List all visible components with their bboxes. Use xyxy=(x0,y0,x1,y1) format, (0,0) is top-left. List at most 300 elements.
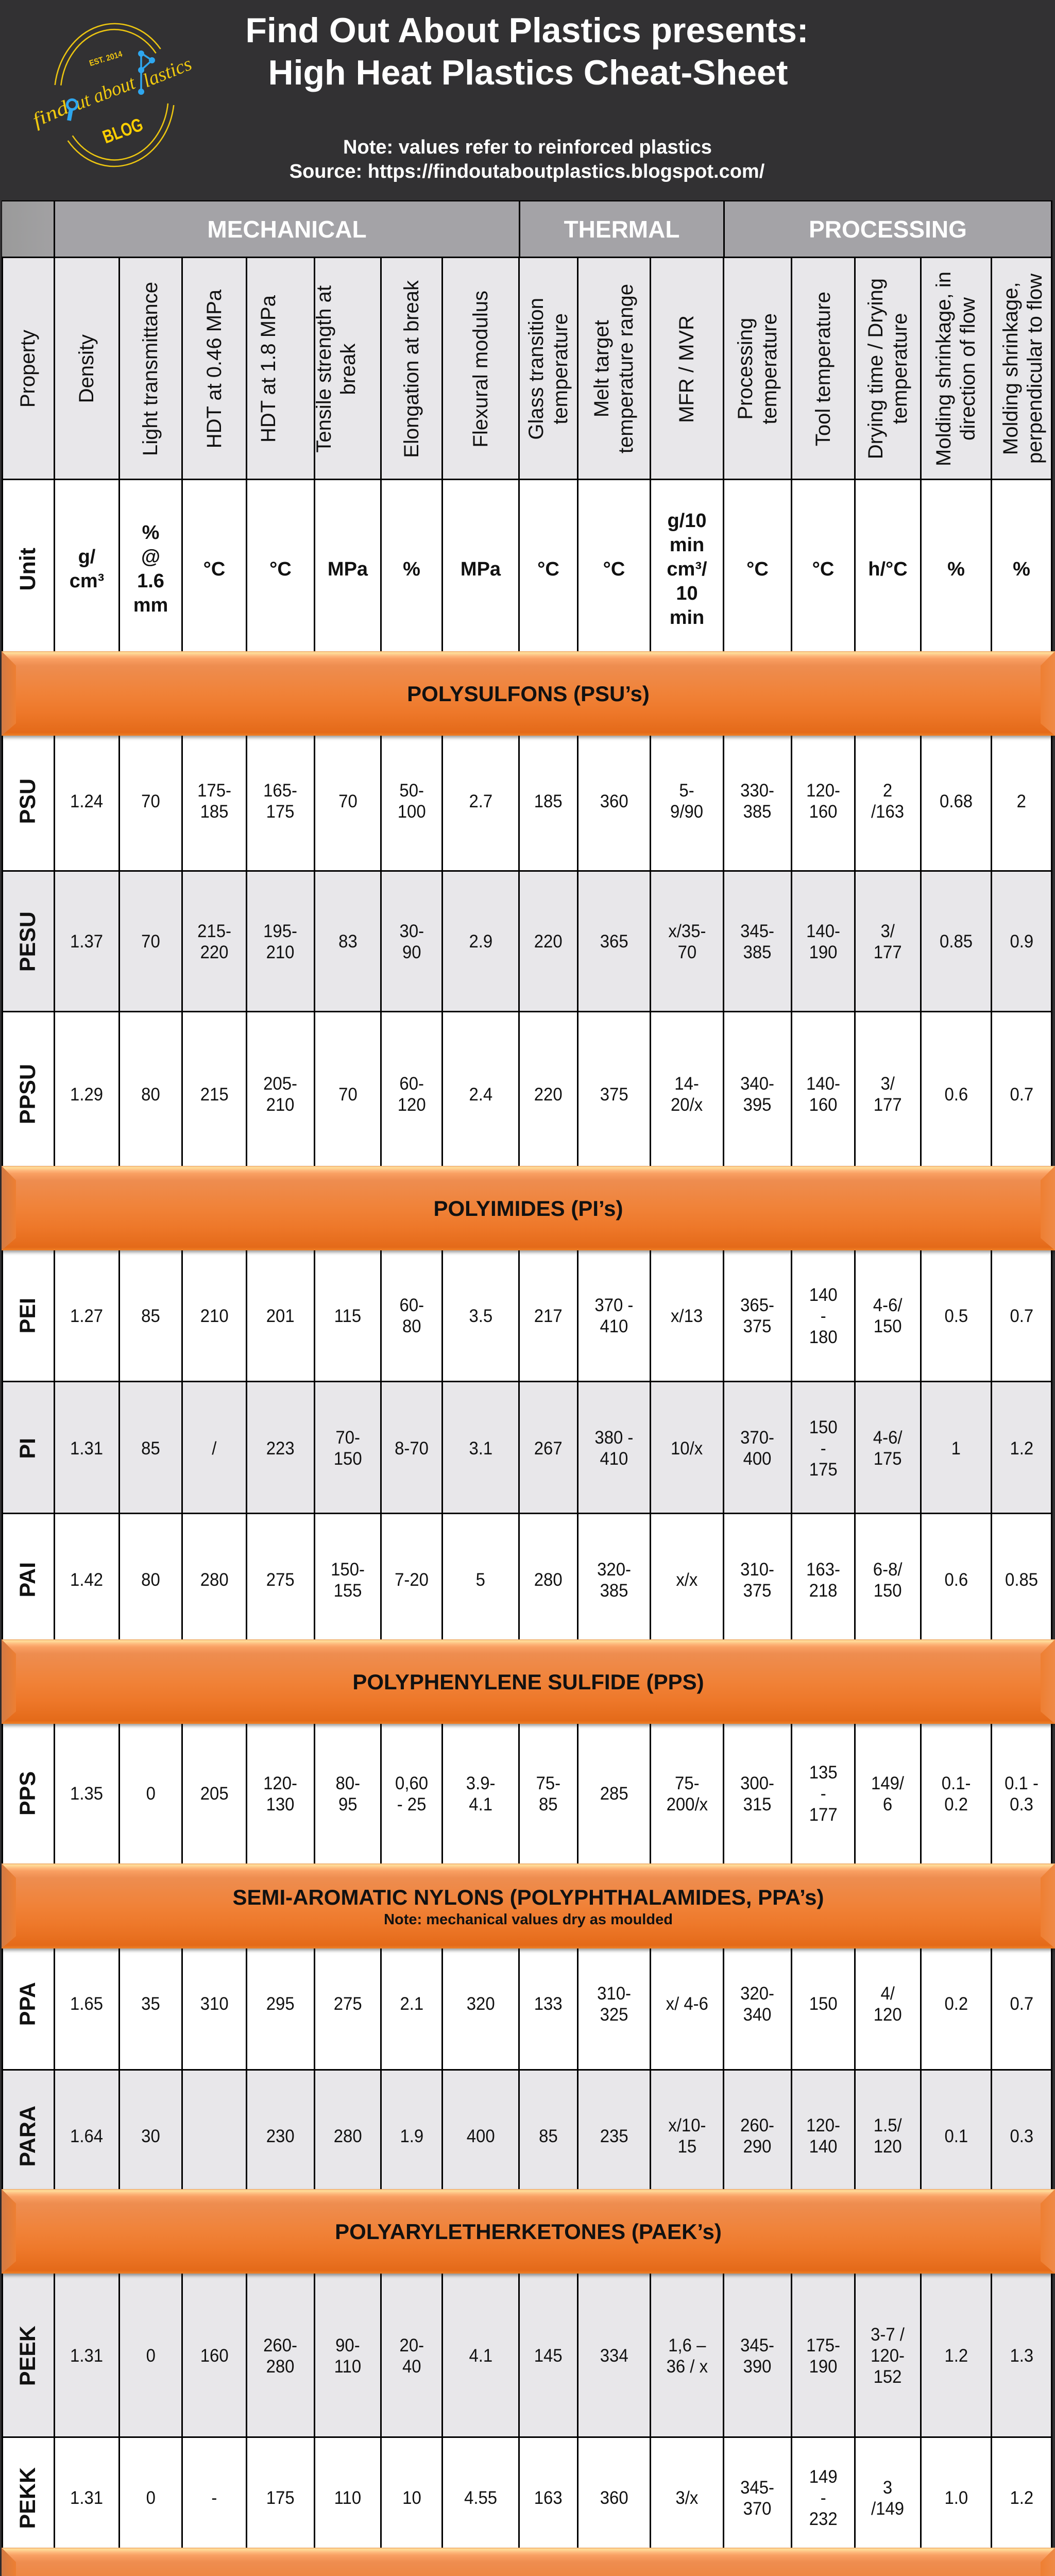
row: PEKK: 345- xyxy=(741,2477,774,2498)
row: PEKK: 1.31 xyxy=(70,2488,104,2508)
row: PPS: 300- xyxy=(741,1773,774,1793)
row: PEEK: PEEK xyxy=(15,2326,40,2386)
row: PEKK: 149 xyxy=(809,2467,837,2487)
row: PEI: 3.5 xyxy=(469,1306,492,1326)
row: PEEK: 152 xyxy=(874,2367,902,2387)
property header row: Molding shrinkage, xyxy=(999,282,1022,455)
property header row: HDT at 0.46 MPa xyxy=(203,290,226,448)
row: PAI: 1.42 xyxy=(70,1570,104,1590)
category header row xyxy=(2,201,1051,258)
row: PESU: 220 xyxy=(534,931,563,952)
row: PSU: 160 xyxy=(809,802,837,822)
row: PAI xyxy=(2,1513,1051,1639)
row: PEI: 0.7 xyxy=(1010,1306,1033,1326)
row: PARA: 230 xyxy=(266,2126,295,2146)
row: PEI: 201 xyxy=(266,1306,295,1326)
property header row: Processing xyxy=(734,318,756,420)
row: PEI: 217 xyxy=(534,1306,563,1326)
row: PSU: 9/90 xyxy=(670,802,704,822)
section band: semi-aromatic nylons: Note: mechanical values dry as moulded xyxy=(384,1911,673,1928)
row: PPA: 133 xyxy=(534,1994,563,2014)
row: PPSU: 395 xyxy=(743,1095,772,1115)
row: PEEK: 1.31 xyxy=(70,2346,104,2366)
row: PI: 4-6/ xyxy=(873,1428,903,1448)
row: PEI: 80 xyxy=(402,1316,421,1336)
row: PPS: 6 xyxy=(883,1794,893,1815)
row: PPS: 135 xyxy=(809,1762,837,1783)
row: PPA: 275 xyxy=(334,1994,362,2014)
row: PARA: 260- xyxy=(741,2115,774,2136)
row: PEI: 210 xyxy=(200,1306,228,1326)
row: PEEK: 40 xyxy=(402,2357,421,2376)
unit row: % xyxy=(403,558,420,580)
row: PEKK: 3/x xyxy=(676,2488,698,2508)
row: PEKK: 232 xyxy=(809,2509,837,2529)
unit row: °C xyxy=(603,558,625,580)
row: PI: 85 xyxy=(141,1438,160,1458)
row: PEI xyxy=(2,1250,1051,1381)
note: Note: values refer to reinforced plastics xyxy=(343,137,712,158)
unit row: 1.6 xyxy=(137,570,164,592)
title line 1: Find Out About Plastics presents: xyxy=(245,11,809,50)
category: thermal: THERMAL xyxy=(564,215,679,242)
row: PAI: 0.6 xyxy=(944,1570,968,1590)
row: PI: PI xyxy=(15,1438,40,1459)
row: PPS: 0.2 xyxy=(944,1794,968,1815)
row: PESU: 365 xyxy=(600,931,628,952)
row: PARA xyxy=(2,2069,1051,2189)
row: PPSU: 3/ xyxy=(881,1074,895,1094)
row: PI: 1.2 xyxy=(1010,1438,1033,1458)
row: PPS: - xyxy=(821,1784,826,1804)
row: PAI: PAI xyxy=(15,1562,40,1598)
row: PARA: 30 xyxy=(141,2126,160,2146)
row: PPSU: 0.7 xyxy=(1010,1084,1033,1105)
row: PEKK: 1.2 xyxy=(1010,2488,1033,2508)
unit row: °C xyxy=(203,558,225,580)
row: PARA: x/10- xyxy=(668,2115,706,2136)
row: PESU: x/35- xyxy=(668,921,706,941)
property header row: MFR / MVR xyxy=(675,315,698,422)
row: PESU: 3/ xyxy=(881,921,895,941)
property header row: Molding shrinkage, in xyxy=(932,272,955,466)
row: PEEK: 36 / x xyxy=(666,2357,708,2376)
row: PAI: 0.85 xyxy=(1005,1570,1038,1590)
row: PI: 380 - xyxy=(595,1428,633,1448)
row: PPSU: 1.29 xyxy=(70,1084,104,1105)
property header row: temperature xyxy=(888,313,911,425)
row: PPS: 130 xyxy=(266,1794,295,1815)
row: PESU: 0.9 xyxy=(1010,931,1033,952)
unit row: @ xyxy=(141,546,160,568)
unit row: °C xyxy=(812,558,834,580)
unit row: min xyxy=(670,534,704,555)
row: PI: 267 xyxy=(534,1438,563,1458)
property header row: Tool temperature xyxy=(812,292,835,446)
row: PPA: PPA xyxy=(15,1982,40,2026)
row: PI: 1.31 xyxy=(70,1438,104,1458)
row: PI: 370- xyxy=(741,1428,774,1448)
row: PEEK: 390 xyxy=(743,2357,772,2376)
row: PSU: 2 xyxy=(1017,791,1026,811)
logo script wordmark: lastics xyxy=(140,53,195,92)
row: PSU: 70 xyxy=(338,791,357,811)
row: PPS: 95 xyxy=(338,1794,357,1815)
section band: semi-aromatic nylons: SEMI-AROMATIC NYLONS (POLYPHTHALAMIDES, PPA’s) xyxy=(232,1885,824,1909)
category: processing: PROCESSING xyxy=(809,215,967,242)
property header row: Light transmittance xyxy=(139,282,162,456)
row: PPSU: 210 xyxy=(266,1095,295,1115)
row: PAI: 375 xyxy=(743,1581,772,1600)
row: PSU: 50- xyxy=(399,781,424,801)
row: PAI: 155 xyxy=(334,1581,362,1600)
row: PEI: 365- xyxy=(741,1295,774,1315)
row: PAI: 320- xyxy=(597,1559,631,1580)
row: PEEK: 1,6 – xyxy=(668,2335,706,2355)
row: PAI: 80 xyxy=(141,1570,160,1590)
property header row: temperature xyxy=(549,313,572,425)
row: PPS: 0 xyxy=(146,1784,156,1804)
row: PPA: 2.1 xyxy=(400,1994,423,2014)
row: PEI: PEI xyxy=(15,1298,40,1334)
row: PEKK xyxy=(2,2436,1051,2548)
logo: find out about plastics blog xyxy=(29,23,195,167)
row: PPA: 295 xyxy=(266,1994,295,2014)
row: PARA: 1.9 xyxy=(400,2126,423,2146)
row: PI: - xyxy=(821,1438,826,1458)
row: PSU: 70 xyxy=(141,791,160,811)
property header row: Tensile strength at xyxy=(313,285,335,452)
row: PPSU: 220 xyxy=(534,1084,563,1105)
row: PPA: 340 xyxy=(743,2004,772,2025)
row: PESU: 177 xyxy=(874,942,902,962)
section band: polyphenylene sulfide: POLYPHENYLENE SULFIDE (PPS) xyxy=(352,1670,704,1694)
logo text: blog: BLOG xyxy=(100,114,146,147)
row: PEEK: 334 xyxy=(600,2346,628,2366)
row: PEI: 115 xyxy=(334,1306,361,1326)
row: PESU: 195- xyxy=(264,921,297,941)
row: PSU: 175- xyxy=(197,781,231,801)
property header row: perpendicular to flow xyxy=(1024,274,1046,464)
row: PPSU: 80 xyxy=(141,1084,160,1105)
row: PESU: 83 xyxy=(338,931,357,952)
property header row xyxy=(2,258,1051,480)
row: PPA: 1.65 xyxy=(70,1994,104,2014)
row: PI: 1 xyxy=(951,1438,961,1458)
row: PAI: 6-8/ xyxy=(873,1559,903,1580)
row: PPS: 0,60 xyxy=(395,1773,428,1793)
row: PSU xyxy=(2,736,1051,871)
unit row xyxy=(2,479,1051,651)
unit row: % xyxy=(947,558,965,580)
row: PEEK: 145 xyxy=(534,2346,563,2366)
row: PSU: 385 xyxy=(743,802,772,822)
row: PPS: 75- xyxy=(675,1773,699,1793)
row: PPSU: PPSU xyxy=(15,1064,40,1125)
source: Source: https://findoutaboutplastics.blogspot.com/ xyxy=(290,161,764,182)
row: PPSU: 14- xyxy=(675,1074,699,1094)
row: PEKK: 3 xyxy=(883,2477,893,2498)
row: PEI: 4-6/ xyxy=(873,1295,903,1315)
row: PEI: - xyxy=(821,1306,826,1326)
row: PEEK: 3-7 / xyxy=(871,2325,905,2345)
row: PPS: 0.1 - xyxy=(1005,1773,1039,1793)
row: PESU: 1.37 xyxy=(70,931,104,952)
section band: polyaryletherketones: POLYARYLETHERKETONES (PAEK’s) xyxy=(335,2219,722,2244)
row: PAI: 150- xyxy=(331,1559,365,1580)
row: PPA: 320 xyxy=(467,1994,495,2014)
category: mechanical: MECHANICAL xyxy=(207,215,367,242)
row: PEI: 1.27 xyxy=(70,1306,104,1326)
row: PARA: 140 xyxy=(809,2137,837,2157)
unit row: cm³ xyxy=(70,570,104,592)
row: PPSU: 120 xyxy=(398,1095,426,1115)
row: PEKK: 10 xyxy=(402,2488,421,2508)
row: PEI: 370 - xyxy=(595,1295,633,1315)
property header row: temperature xyxy=(758,313,781,425)
row: PSU: 120- xyxy=(806,781,840,801)
property header row: temperature range xyxy=(615,284,637,454)
row: PESU: 2.9 xyxy=(469,931,492,952)
row: PI: 3.1 xyxy=(469,1438,492,1458)
row: PI: 400 xyxy=(743,1449,772,1469)
row: PEEK: 345- xyxy=(741,2335,774,2355)
row: PPA: 320- xyxy=(741,1984,774,2003)
row: PARA: 120- xyxy=(806,2115,840,2136)
row: PAI: x/x xyxy=(676,1570,698,1590)
row: PPS: 3.9- xyxy=(466,1773,495,1793)
category: processing xyxy=(723,201,1051,257)
row: PPS: 315 xyxy=(743,1794,772,1815)
row: PARA: 1.64 xyxy=(70,2126,104,2146)
row: PESU xyxy=(2,870,1051,1011)
row: PESU: 30- xyxy=(399,921,424,941)
row: PEEK: 0 xyxy=(146,2346,156,2366)
property header row: Density xyxy=(75,334,98,403)
property header row: Glass transition xyxy=(524,298,547,440)
row: PPS: 200/x xyxy=(666,1794,708,1815)
row: PEEK xyxy=(2,2274,1051,2437)
row: PI: 175 xyxy=(809,1459,837,1480)
property header row: Flexural modulus xyxy=(469,291,491,447)
row: PEKK: 0 xyxy=(146,2488,156,2508)
row: PAI: 385 xyxy=(600,1581,628,1600)
row: PSU: 2.7 xyxy=(469,791,492,811)
row: PESU: 190 xyxy=(809,942,837,962)
row: PARA: 85 xyxy=(539,2126,558,2146)
row: PI: 8-70 xyxy=(395,1438,429,1458)
row: PPS: - 25 xyxy=(397,1794,426,1815)
row: PI: 410 xyxy=(600,1449,628,1469)
row: PAI: 280 xyxy=(200,1570,228,1590)
row: PSU: 5- xyxy=(679,781,694,801)
row: PEI: 60- xyxy=(399,1295,424,1315)
unit row: MPa xyxy=(328,558,368,580)
row: PPSU: 215 xyxy=(200,1084,228,1105)
row: PSU: 330- xyxy=(741,781,774,801)
logo text: est. 2014: EST. 2014 xyxy=(88,50,124,68)
unit row: % xyxy=(142,522,159,544)
section band: polyphenylene sulfide xyxy=(2,1639,1055,1724)
logo script wordmark: ut about xyxy=(72,72,139,114)
row: PEKK: 360 xyxy=(600,2488,628,2508)
row: PSU: 185 xyxy=(200,802,228,822)
row: PPA: 310 xyxy=(200,1994,228,2014)
row: PPA: 310- xyxy=(597,1984,631,2003)
row: PEEK: 20- xyxy=(399,2335,424,2355)
row: PPS: PPS xyxy=(15,1771,40,1816)
unit row: MPa xyxy=(461,558,501,580)
section band: polyimides: POLYIMIDES (PI’s) xyxy=(434,1196,623,1221)
row: PPSU: 70 xyxy=(338,1084,357,1105)
row: PPA: 35 xyxy=(141,1994,160,2014)
row: PAI: 5 xyxy=(476,1570,485,1590)
row: PPA: 0.7 xyxy=(1010,1994,1033,2014)
property header row: break xyxy=(337,343,360,395)
property header row: Property xyxy=(16,330,39,408)
row: PPS: 80- xyxy=(335,1773,360,1793)
unit row: g/ xyxy=(78,546,95,568)
row: PEEK: 160 xyxy=(200,2346,228,2366)
row: PARA: PARA xyxy=(15,2106,40,2166)
row: PPS: 285 xyxy=(600,1784,628,1804)
row: PPSU: 60- xyxy=(399,1074,424,1094)
row: PEKK: 175 xyxy=(266,2488,295,2508)
row: PPS: 149/ xyxy=(871,1773,905,1793)
row: PEEK: 1.2 xyxy=(944,2346,968,2366)
row: PSU: 0.68 xyxy=(940,791,973,811)
row: PEI: 140 xyxy=(809,1285,837,1304)
unit row: °C xyxy=(746,558,769,580)
unit row: % xyxy=(1013,558,1030,580)
row: PEI: 85 xyxy=(141,1306,160,1326)
row: PPSU: 160 xyxy=(809,1095,837,1115)
row: PPSU: 0.6 xyxy=(944,1084,968,1105)
row: PPS: 177 xyxy=(809,1805,837,1825)
row: PPSU: 375 xyxy=(600,1084,628,1105)
row: PPSU: 340- xyxy=(741,1074,774,1094)
row: PESU: 70 xyxy=(677,942,696,962)
row: PPS: 1.35 xyxy=(70,1784,104,1804)
row: PEKK: 370 xyxy=(743,2499,772,2518)
row: PESU: 70 xyxy=(141,931,160,952)
unit row: h/°C xyxy=(868,558,908,580)
row: PEEK: 1.3 xyxy=(1010,2346,1033,2366)
row: PPS: 4.1 xyxy=(469,1794,492,1815)
row: PSU: 100 xyxy=(398,802,426,822)
row: PESU: 215- xyxy=(197,921,231,941)
row: PPSU: 20/x xyxy=(671,1095,703,1115)
section band: polyimides xyxy=(2,1166,1055,1250)
row: PEEK: 120- xyxy=(871,2346,905,2366)
row: PPA xyxy=(2,1948,1051,2070)
category: thermal xyxy=(519,201,723,257)
row: PEEK: 90- xyxy=(335,2335,360,2355)
unit row: °C xyxy=(269,558,292,580)
row: PARA: 290 xyxy=(743,2137,772,2157)
section band: polyaryletherketones xyxy=(2,2189,1055,2274)
row: PEKK: 1.0 xyxy=(944,2488,968,2508)
row: PPSU: 177 xyxy=(874,1095,902,1115)
unit row: min xyxy=(670,607,704,629)
title line 2: High Heat Plastics Cheat-Sheet xyxy=(268,53,788,92)
row: PEKK: 110 xyxy=(334,2488,361,2508)
section band: polysulfons xyxy=(2,651,1055,736)
row: PAI: 275 xyxy=(266,1570,295,1590)
row: PEKK: PEKK xyxy=(15,2467,40,2529)
row: PAI: 218 xyxy=(809,1581,837,1600)
row: PI: / xyxy=(212,1438,217,1458)
row: PI: 150 xyxy=(334,1449,362,1469)
row: PSU: 165- xyxy=(264,781,297,801)
row: PAI: 310- xyxy=(741,1559,774,1580)
row: PPS: 0.3 xyxy=(1010,1794,1033,1815)
row: PSU: 360 xyxy=(600,791,628,811)
row: PEI: 410 xyxy=(600,1316,628,1336)
logo rings xyxy=(55,24,174,166)
row: PAI: 150 xyxy=(874,1581,902,1600)
row: PPSU: 205- xyxy=(264,1074,297,1094)
row: PEI: 180 xyxy=(809,1327,837,1347)
row: PEI: 375 xyxy=(743,1316,772,1336)
property header row: Drying time / Drying xyxy=(864,278,887,460)
row: PEKK: /149 xyxy=(871,2499,905,2518)
row: PPA: 325 xyxy=(600,2004,628,2025)
row: PPS: 205 xyxy=(200,1784,228,1804)
row: PARA: 1.5/ xyxy=(874,2115,902,2136)
logo script wordmark xyxy=(29,53,195,131)
row: PEEK: 175- xyxy=(806,2335,840,2355)
row: PPA: 120 xyxy=(874,2004,902,2025)
row: PI: 175 xyxy=(874,1449,902,1469)
row: PESU: 345- xyxy=(741,921,774,941)
row: PEKK: 4.55 xyxy=(464,2488,497,2508)
property header row: HDT at 1.8 MPa xyxy=(257,295,280,443)
row: PEKK: - xyxy=(821,2488,826,2508)
row: PEI: 0.5 xyxy=(944,1306,968,1326)
unit row: mm xyxy=(133,595,168,616)
row: PESU: PESU xyxy=(15,911,40,972)
section band: polysulfons: POLYSULFONS (PSU’s) xyxy=(407,682,650,706)
row: PEI: x/13 xyxy=(671,1306,703,1326)
row: PARA: 400 xyxy=(467,2126,495,2146)
row: PPS: 75- xyxy=(536,1773,560,1793)
row: PARA: 120 xyxy=(874,2137,902,2157)
row: PPA: 4/ xyxy=(881,1984,895,2003)
unit row: 10 xyxy=(676,582,698,604)
row: PESU: 90 xyxy=(402,942,421,962)
row: PEEK: 4.1 xyxy=(469,2346,492,2366)
row: PPA: x/ 4-6 xyxy=(666,1994,708,2014)
row: PARA: 235 xyxy=(600,2126,628,2146)
row: PSU: 1.24 xyxy=(70,791,104,811)
row: PESU: 0.85 xyxy=(940,931,973,952)
row: PSU: 175 xyxy=(266,802,295,822)
row: PARA: 0.3 xyxy=(1010,2126,1033,2146)
row: PSU: 185 xyxy=(534,791,563,811)
row: PEEK: 110 xyxy=(334,2357,361,2376)
row: PEEK: 280 xyxy=(266,2357,295,2376)
row: PPA: 150 xyxy=(809,1994,837,2014)
row: PI: 10/x xyxy=(671,1438,703,1458)
row: PESU: 140- xyxy=(806,921,840,941)
row: PARA: 0.1 xyxy=(944,2126,968,2146)
unit row: Unit xyxy=(15,548,40,591)
section band: semi-aromatic nylons xyxy=(2,1863,1055,1948)
row: PI: 150 xyxy=(809,1417,837,1437)
row: PAI: 280 xyxy=(534,1570,563,1590)
row: PI: 70- xyxy=(335,1428,360,1448)
